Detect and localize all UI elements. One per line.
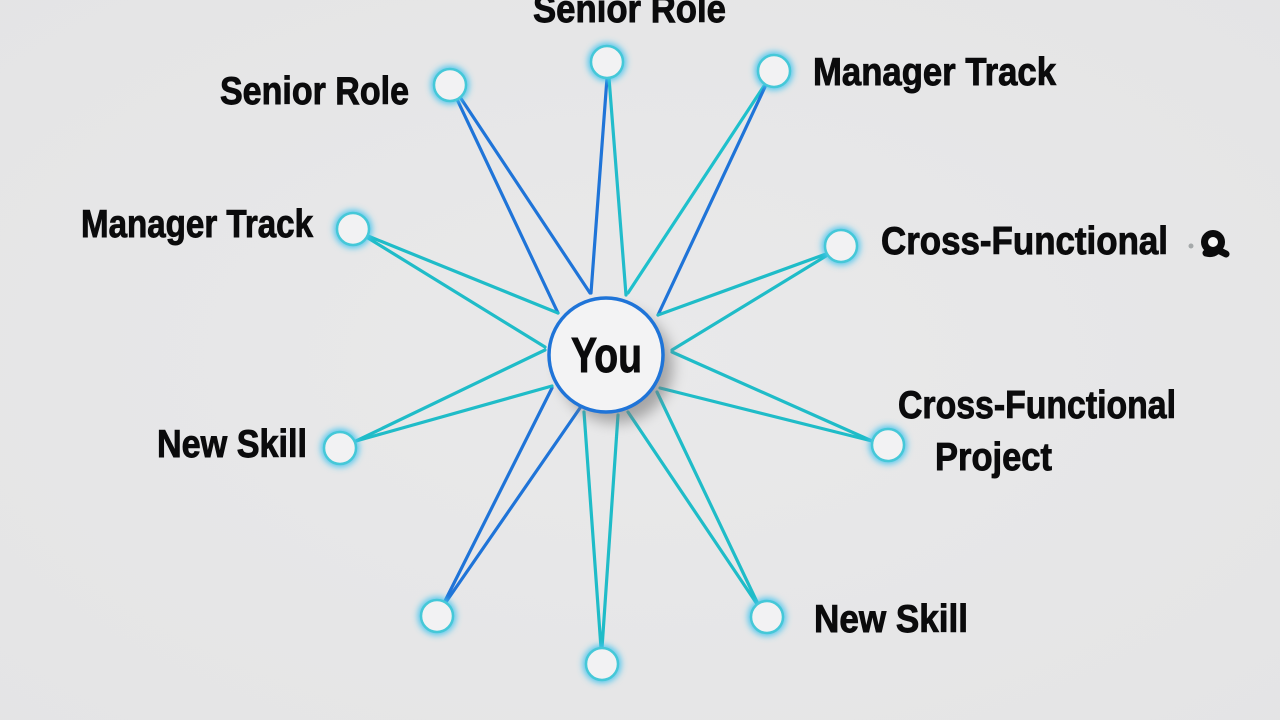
node: bottom xyxy=(583,645,621,683)
connector: cross-functional project xyxy=(660,352,872,441)
node: cross-functional xyxy=(822,227,860,265)
node: cross-functional project xyxy=(869,426,907,464)
connector: senior role left xyxy=(455,94,590,313)
label: New Skill right: New Skill xyxy=(814,598,968,641)
label: Manager Track right: Manager Track xyxy=(813,51,1056,94)
node: new skill right xyxy=(748,598,786,636)
connector: bottom node xyxy=(584,412,618,648)
node: manager track right xyxy=(755,52,793,90)
node: senior role left xyxy=(431,66,469,104)
label: Cross-Functional Project: Cross-Functional xyxy=(898,384,1176,427)
connector lines xyxy=(356,78,872,648)
connector: manager track right xyxy=(628,86,765,315)
node: senior role top xyxy=(588,43,626,81)
label: Manager Track left: Manager Track xyxy=(81,203,313,246)
label: New Skill left: New Skill xyxy=(157,423,307,466)
label: Cross-Functional: Cross-Functional xyxy=(881,220,1168,263)
center node: You xyxy=(549,298,673,423)
connector: new skill left xyxy=(356,350,552,441)
node: manager track left xyxy=(334,210,372,248)
label: Cross-Functional Project xyxy=(898,384,1176,479)
connector: bottom left node xyxy=(445,388,580,602)
label: Cross-Functional Project: Project xyxy=(935,436,1052,479)
connector: senior role top xyxy=(591,78,626,295)
connector: new skill right xyxy=(628,392,757,604)
outer nodes xyxy=(321,43,907,683)
node: new skill left xyxy=(321,429,359,467)
connector: cross-functional xyxy=(658,254,826,350)
icon: cursor mark xyxy=(1188,234,1226,254)
connector: manager track left xyxy=(368,236,558,347)
center node: You: You xyxy=(571,329,642,383)
label: Senior Role left: Senior Role xyxy=(220,70,409,113)
node: bottom left xyxy=(418,597,456,635)
